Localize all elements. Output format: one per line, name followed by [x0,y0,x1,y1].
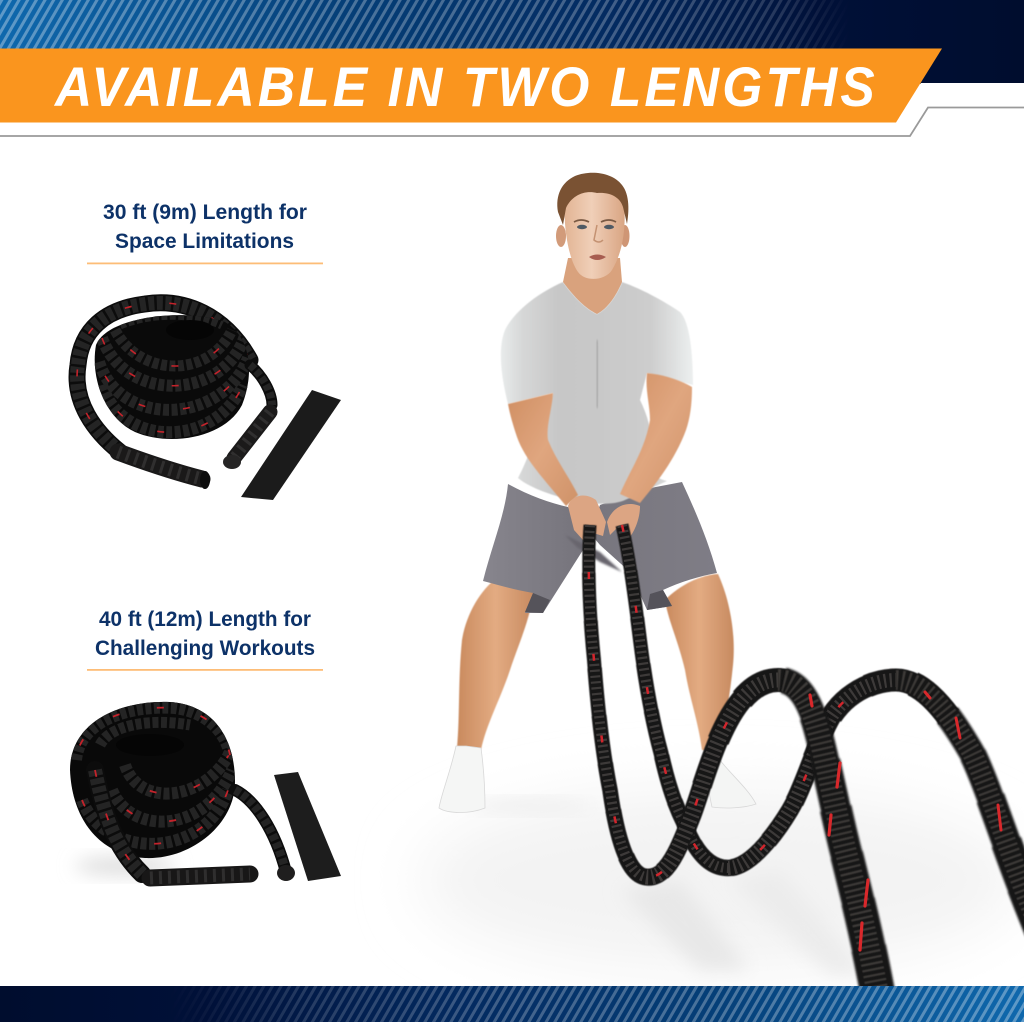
shorts [483,482,717,613]
heading: 30 ft option: 30 ft (9m) Length for [103,200,308,224]
product photo: 40 ft rope coil with strap [70,702,341,881]
right shoe [704,752,756,808]
left arm [508,393,578,506]
anchor strap [274,772,341,881]
left leg [457,578,534,750]
heading: 40 ft option: 40 ft (12m) Length for [99,607,312,631]
anchor strap [241,390,341,500]
athlete [439,173,756,812]
battle rope: near strand [589,525,878,995]
right hand [607,504,640,540]
right leg [665,574,734,752]
heading: 30 ft option [103,200,308,253]
heading: 40 ft option [95,607,315,660]
near strand red flecks [810,695,868,950]
title banner [0,48,942,122]
left shoe [439,746,485,812]
coiled pile [95,315,249,439]
near strand body [589,525,878,995]
title: AVAILABLE IN TWO LENGTHS [53,56,875,118]
hair [557,173,628,225]
near strand blurred end [589,525,878,995]
header white step and grey line [0,83,1024,136]
product photo: 30 ft rope coil with strap [77,303,341,500]
face [565,191,625,279]
ears [556,225,566,247]
facial features [574,220,616,260]
far strand body [622,525,1024,930]
coil shadow [75,857,175,875]
neck [563,258,622,314]
heading: 30 ft option: Space Limitations [115,229,294,253]
tail rope [235,790,295,881]
floor backdrop with shadows [420,790,1020,975]
right arm [620,373,692,503]
front rope and handle [95,770,250,878]
outer rope loop [77,303,250,452]
heading: 40 ft option: Challenging Workouts [95,636,315,660]
far strand blurred end [622,525,1024,930]
t-shirt [501,282,693,504]
battle rope: far strand [622,525,1024,930]
bottom footer stripe band [0,986,1024,1022]
left hand [568,495,606,540]
second end handle [223,365,272,469]
free end handle [118,452,210,489]
coiled pile [70,702,235,858]
header grey rule [0,108,1024,136]
top header stripe band [0,0,1024,84]
far strand red flecks [925,692,1001,830]
orange banner shape [0,48,942,122]
